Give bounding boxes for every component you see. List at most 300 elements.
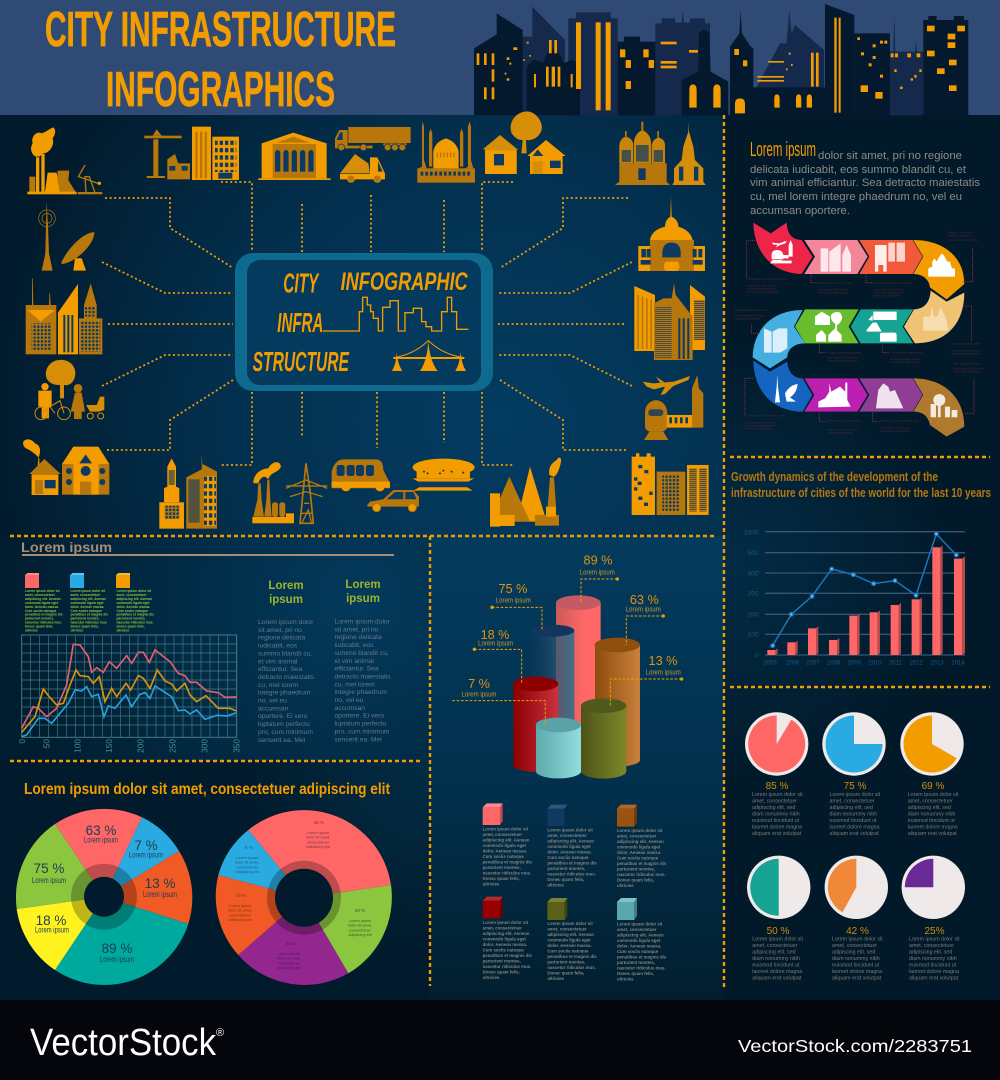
donut chart right: dolor sit amet, xyxy=(277,956,301,961)
grid and axis labels: 2005 xyxy=(763,660,777,666)
legend: colour cubes with green text: amet, consectetuer xyxy=(116,593,147,597)
snake red callouts: buildings, churches xyxy=(948,234,970,237)
donut chart left: 75 % xyxy=(34,861,64,876)
title: CITY INFRASTRUCTURE xyxy=(45,3,396,57)
legend: colour cubes with green text: dolor. Aenean massa. xyxy=(25,605,59,609)
legend text: penatibus et magnis dis xyxy=(617,861,667,866)
text column two: accumsan xyxy=(334,705,365,712)
legend: colour cubes with green text: dolor. Aenean massa. xyxy=(70,605,104,609)
icon: skyscraper cluster xyxy=(634,283,705,360)
x axis labels: 300 xyxy=(199,739,209,753)
text column two: detracto maiestatis xyxy=(334,673,391,680)
donut chart left: Lorem ipsum xyxy=(35,926,69,934)
small pie 25 percent: diam nonummy nibh xyxy=(909,956,957,962)
text column two: Lorem xyxy=(345,579,381,591)
legend text: dolor. Aenean massa. xyxy=(617,943,661,948)
small pie 42 percent: euismod tincidunt ut xyxy=(832,962,880,968)
legend text: Donec quam felis, xyxy=(483,876,520,881)
donut chart left: Lorem ipsum xyxy=(32,876,66,885)
small pie 85 percent xyxy=(745,712,808,837)
legend: colour cubes with green text: penatibus et magnis dis xyxy=(116,613,154,617)
donut chart right: consectetuer xyxy=(307,839,330,844)
text column one: efficiantur. Sea xyxy=(258,666,302,673)
donut chart left: 89 % xyxy=(102,941,132,956)
legend text: Lorem ipsum dolor sit xyxy=(483,827,528,832)
icon: stadium xyxy=(412,459,475,491)
text block: lorem ipsum intro xyxy=(750,139,980,217)
legend text: penatibus et magnis dis xyxy=(547,954,597,959)
snake red callouts xyxy=(735,232,984,434)
legend text: Cum sociis natoque xyxy=(547,948,589,953)
text block: lorem ipsum intro: Lorem ipsum xyxy=(750,139,816,161)
small pie 25 percent: amet, consectetuer xyxy=(909,943,954,949)
heading: growth dynamics xyxy=(731,470,991,500)
panel: background donut section xyxy=(0,761,430,1001)
legend text xyxy=(483,827,667,981)
grid and axis labels: 2006 xyxy=(786,660,800,666)
growth bar and line chart xyxy=(744,529,965,666)
small pie 85 percent: euismod tincidunt ut xyxy=(752,818,800,824)
title xyxy=(45,3,396,117)
donut chart right: consectetuer xyxy=(349,927,372,932)
small pie 25 percent: euismod tincidunt ut xyxy=(909,962,957,968)
callout 89 percent xyxy=(580,554,619,603)
icon: crane and buildings xyxy=(144,127,239,180)
legend: colour cubes with green text: Lorem ipsum dolor sit xyxy=(25,589,60,593)
small pie 50 percent: aliquam erat volutpat xyxy=(752,976,802,982)
donut chart right: adipiscing elit xyxy=(306,844,331,849)
grid and axis labels: 100 xyxy=(748,632,759,639)
grid and axis labels: 2011 xyxy=(889,660,902,666)
title: INFOGRAPHICS xyxy=(106,63,335,117)
legend text: nascetur ridiculus mus. xyxy=(547,872,596,877)
text column two: et vim animal xyxy=(334,658,374,665)
small pie 85 percent: amet, consectetuer xyxy=(752,798,797,804)
legend: colour cubes with green text: ultricies xyxy=(116,628,129,632)
text block: lorem ipsum intro: accumsan oportere. xyxy=(750,205,850,217)
legend: colour cubes with green text: amet, consectetuer xyxy=(25,593,56,597)
legend: colour cubes with green text: Cum sociis natoque xyxy=(116,609,148,613)
central city infographic badge: CITY xyxy=(283,268,320,299)
text column one: cu, mel lorem xyxy=(258,682,299,689)
snake red callouts: Lorem ipsum dolor sit amet, xyxy=(953,367,984,370)
small pie 75 percent: aliquam erat volutpat xyxy=(830,831,879,837)
legend text: parturient montes, xyxy=(617,960,655,965)
legend text: Cum sociis natoque xyxy=(617,855,659,860)
callout 7 percent: Lorem ipsum xyxy=(461,691,497,698)
legend text: adipiscing elit. Aenean xyxy=(483,931,530,936)
snake red callouts: Lorem ipsum dolor sit amet, xyxy=(818,289,849,292)
donut chart right: dolor sit amet, xyxy=(306,835,330,840)
snake red callouts: Lorem ipsum dolor sit amet, xyxy=(747,285,778,288)
callout 89 percent: Lorem ipsum xyxy=(580,569,615,576)
text column one: Lorem xyxy=(268,580,304,592)
snake white icons xyxy=(764,240,957,417)
donut chart right: dolor sit amet, xyxy=(228,908,252,913)
legend text: Donec quam felis, xyxy=(617,971,654,976)
legend text: Donec quam felis, xyxy=(547,877,584,882)
small pie 50 percent: amet, consectetuer xyxy=(752,943,798,949)
grid and axis labels: 400 xyxy=(748,570,759,577)
legend text: ultricies xyxy=(617,976,634,981)
small pie 25 percent xyxy=(902,856,965,982)
legend text: parturient montes, xyxy=(483,865,521,870)
legend: colour cubes with green text: commodo ligula eget xyxy=(25,601,59,605)
x axis labels: 200 xyxy=(136,739,146,753)
legend text: nascetur ridiculus mus. xyxy=(617,872,666,877)
text column two: oportere. Ei vero xyxy=(334,713,384,720)
small pie 50 percent: 50 % xyxy=(767,926,790,937)
text column two: senserit ea. Mei xyxy=(334,736,382,743)
small pie 85 percent: laoreet dolore magna xyxy=(752,824,802,830)
snake red callouts: Lorem ipsum dolor sit amet xyxy=(948,239,979,242)
legend text: ultricies xyxy=(483,882,500,887)
donut chart right: 35 % xyxy=(314,820,324,825)
text column one xyxy=(258,580,315,744)
small pie 50 percent: Lorem ipsum dolor sit xyxy=(752,936,803,942)
snake red callouts: Transportation: freight, buses xyxy=(890,351,922,354)
donut chart right: 8 % xyxy=(245,845,253,850)
small pie 85 percent: aliquam erat volutpat xyxy=(752,831,802,837)
small pie 69 percent: 69 % xyxy=(922,781,945,792)
section dividers xyxy=(10,115,990,990)
callout 63 percent: 63 % xyxy=(630,593,659,607)
grid and axis labels: 2010 xyxy=(868,660,882,666)
snake red callouts: aenean commodo ligula xyxy=(873,295,900,298)
legend text: Lorem ipsum dolor sit xyxy=(617,828,662,833)
small pie 50 percent: euismod tincidunt ut xyxy=(752,962,800,968)
grid xyxy=(22,635,237,737)
icon: mosque xyxy=(417,122,475,183)
snake red callouts: consectetuer adipiscing elit xyxy=(747,288,777,291)
icon: museum xyxy=(258,133,331,180)
snake red callouts: consectetuer adipiscing elit xyxy=(873,292,903,295)
text column one: et vim animal xyxy=(258,658,298,665)
legend text: dolor. Aenean massa. xyxy=(483,849,527,854)
text column two xyxy=(334,579,391,743)
panel: background chart section xyxy=(0,536,430,761)
grid and axis labels: 2008 xyxy=(827,660,841,666)
snake red callouts: Business areas: the city centre xyxy=(818,282,852,285)
small pie 42 percent xyxy=(825,856,888,982)
donut chart left: 18 % xyxy=(36,913,66,928)
small pie 42 percent: adipiscing elit, sed xyxy=(832,950,875,956)
snake red callouts: Communication infrastructure, radio xyxy=(745,415,784,418)
legend text: Cum sociis natoque xyxy=(483,947,524,952)
text column one: no, vel eu xyxy=(258,698,287,704)
donut chart right: Lorem ipsum xyxy=(278,951,300,956)
snake red callouts: Lorem ipsum dolor sit amet, xyxy=(951,350,982,353)
callout 63 percent xyxy=(626,593,665,645)
text column one: senserit ea. Mei xyxy=(258,737,306,744)
legend: colour cubes with green text: dolor. Aenean massa. xyxy=(116,605,150,609)
small pie 75 percent: adipiscing elit, sed xyxy=(830,805,873,811)
text block: lorem ipsum intro: dolor sit amet, pri no regione xyxy=(818,150,962,162)
legend: colour cubes with green text: parturient montes, xyxy=(70,617,100,621)
small pie 50 percent: laoreet dolore magna xyxy=(752,969,802,975)
callout 89 percent: 89 % xyxy=(584,554,612,568)
small pie 42 percent: amet, consectetuer xyxy=(832,943,877,949)
donut chart right: 19 % xyxy=(236,893,246,898)
legend text: Lorem ipsum dolor sit xyxy=(617,921,662,926)
text column one: summo blandit cu, xyxy=(258,650,312,657)
legend text: penatibus et magnis dis xyxy=(617,954,667,959)
legend text: Cum sociis natoque xyxy=(617,949,659,954)
snake red callouts: consectetuer adipiscing xyxy=(953,370,980,373)
donut chart right: adipiscing elit xyxy=(228,917,253,922)
callout 13 percent: Lorem ipsum xyxy=(646,669,681,676)
donut chart right xyxy=(216,810,392,985)
snake red callouts: Lorem ipsum dolor sit amet, xyxy=(890,358,921,361)
legend text: Donec quam felis, xyxy=(547,970,584,975)
donut chart left: Lorem ipsum xyxy=(84,836,118,844)
legend cube colours xyxy=(483,803,637,920)
dotted connectors xyxy=(102,182,632,465)
x axis labels: 250 xyxy=(167,739,177,753)
central city infographic badge: INFOGRAPHIC xyxy=(341,268,468,296)
small pie 69 percent: euismod tincidunt ut xyxy=(908,818,955,824)
text column two: integre phaedrum xyxy=(334,689,387,696)
text block: lorem ipsum intro: vim animal efficiantur. Sea detracto maiestatis xyxy=(750,177,980,189)
legend text: ultricies xyxy=(547,883,565,888)
callout 75 percent: 75 % xyxy=(499,582,527,596)
small pie 69 percent: laoreet dolore magna xyxy=(908,824,958,830)
callout 18 percent: 18 % xyxy=(481,628,509,642)
legend text: parturient montes, xyxy=(483,958,521,963)
legend text: ultricies xyxy=(617,883,634,888)
donut chart right: Lorem ipsum xyxy=(307,830,329,835)
grid and axis labels: 2012 xyxy=(910,660,924,666)
central city infographic badge: STRUCTURE xyxy=(253,346,349,377)
heading: donut section: Lorem ipsum dolor sit amet, consectetuer adipiscing elit xyxy=(24,781,391,798)
callout 13 percent: 13 % xyxy=(649,654,677,668)
city skyline xyxy=(474,4,968,115)
cylinder chart xyxy=(452,554,683,779)
orange series xyxy=(22,670,237,732)
grid and axis labels: 500 xyxy=(748,550,759,557)
snake red callouts: aenean commodo ligula xyxy=(745,427,772,430)
bars xyxy=(767,546,965,655)
small pie 25 percent: aliquam erat volutpat xyxy=(909,976,959,982)
legend text: adipiscing elit. Aenean xyxy=(547,932,594,937)
legend: colour cubes with green text: penatibus et magnis dis xyxy=(70,613,108,617)
legend: colour cubes with green text: Cum sociis natoque xyxy=(25,609,56,613)
legend text: commodo ligula eget xyxy=(483,936,527,941)
legend text: penatibus et magnis dis xyxy=(547,861,597,866)
text column one: sit amet, pri no xyxy=(258,627,302,634)
donut chart right: Lorem ipsum xyxy=(229,903,251,908)
panel: background top-left xyxy=(0,115,724,536)
grid and axis labels: 1000 xyxy=(744,529,759,536)
text block: lorem ipsum intro: cu, mel lorem integre phaedrum no, vel eu xyxy=(750,191,962,203)
central city infographic badge: INFRA xyxy=(277,307,323,338)
x axis labels: 0 xyxy=(17,739,27,744)
grid and axis labels: 300 xyxy=(748,591,759,598)
small pie 75 percent: amet, consectetuer xyxy=(830,798,875,804)
text column one: ipsum xyxy=(269,594,303,606)
legend text: commodo ligula eget xyxy=(617,938,661,943)
callout 18 percent: Lorem ipsum xyxy=(478,641,513,648)
legend text: Lorem ipsum dolor sit xyxy=(483,920,528,925)
small pie 69 percent: aliquam erat volutpat xyxy=(908,831,957,837)
line chart with grid xyxy=(17,635,242,753)
legend text: Donec quam felis, xyxy=(483,969,520,974)
snake red callouts: Lorem ipsum dolor sit amet, xyxy=(827,357,858,360)
header band xyxy=(0,0,1000,115)
grid and axis labels: 2009 xyxy=(848,660,862,666)
legend text: Cum sociis natoque xyxy=(547,855,589,860)
icons top row xyxy=(27,122,475,194)
snake red callouts: Lorem ipsum dolor sit amet, xyxy=(827,428,858,431)
legend text: ultricies xyxy=(547,976,565,981)
text column one: luptatum perfecto xyxy=(258,721,310,728)
snake red callouts: Business areas, skyscrapers xyxy=(735,309,767,312)
legend: colour cubes with green text: Donec quam felis, xyxy=(116,625,145,629)
small pie 42 percent: aliquam erat volutpat xyxy=(832,976,882,982)
legend text: nascetur ridiculus mus. xyxy=(547,965,596,970)
callout 75 percent xyxy=(490,582,542,631)
x axis labels: 100 xyxy=(73,739,83,753)
small pie 25 percent: 25% xyxy=(924,926,945,937)
icon: family with bicycle and pram xyxy=(35,360,104,420)
donut chart right: adipiscing elit xyxy=(277,965,302,970)
small pie 75 percent: laoreet dolore magna xyxy=(830,824,880,830)
icon: orthodox churches xyxy=(615,122,706,185)
legend: colour cubes with green text: Cum sociis natoque xyxy=(70,609,102,613)
legend text: adipiscing elit. Aenean xyxy=(617,839,664,844)
x axis labels: 150 xyxy=(104,739,114,753)
text column one: accumsan xyxy=(258,705,289,712)
legend: colour cubes with green text: Lorem ipsum dolor sit xyxy=(116,589,151,593)
legend text: penatibus et magnis dis xyxy=(483,953,533,958)
small pie 25 percent: laoreet dolore magna xyxy=(909,969,959,975)
text column two: pro, cum minimum xyxy=(334,728,390,735)
legend: colour cubes with green text: Donec quam felis, xyxy=(70,625,99,629)
text column one: oportere. Ei vero xyxy=(258,713,308,720)
donut chart right: adipiscing elit xyxy=(348,932,373,937)
text column one: Lorem ipsum dolor xyxy=(258,619,313,626)
legend: colour cubes with green text: nascetur ridiculus mus. xyxy=(25,621,62,625)
grid and axis labels: 2013 xyxy=(930,660,944,666)
snake red callouts: Industry and energy: plants xyxy=(951,342,981,345)
donut chart right: dolor sit amet, xyxy=(235,860,259,865)
icon: factory and pylon xyxy=(252,462,327,523)
text column one: pro, cum minimum xyxy=(258,729,313,736)
legend text: Lorem ipsum dolor sit xyxy=(547,921,593,926)
snake red callouts: Religious and cultural xyxy=(948,232,972,235)
small pie 25 percent: adipiscing elit, sed xyxy=(909,950,952,956)
donut chart right: 28 % xyxy=(355,908,365,913)
small pie 75 percent: diam nonummy nibh xyxy=(830,812,877,818)
text column two: iudicabit, eos xyxy=(334,642,374,649)
snake red callouts: consectetuer adipiscing elit xyxy=(745,424,775,427)
legend text: penatibus et magnis dis xyxy=(483,860,533,865)
legend text: amet, consectetuer xyxy=(617,833,657,838)
x axis labels: 350 xyxy=(232,739,242,753)
legend text: nascetur ridiculus mus. xyxy=(483,964,531,969)
legend text: nascetur ridiculus mus. xyxy=(483,871,531,876)
red series xyxy=(22,644,237,728)
text column two: regione delicata xyxy=(334,634,382,641)
small pie 42 percent: diam nonummy nibh xyxy=(832,956,880,962)
process snake chart xyxy=(735,223,984,437)
watermark bar: ® xyxy=(216,1027,224,1039)
legend text: Cum sociis natoque xyxy=(483,854,524,859)
text column two: no, vel eu xyxy=(334,697,364,704)
x axis labels: 50 xyxy=(41,739,51,748)
legend text: parturient montes, xyxy=(617,866,655,871)
callout 7 percent xyxy=(452,677,545,725)
icon: radio tower and dish xyxy=(39,202,94,271)
legend: colour cubes with green text: ultricies xyxy=(25,628,38,632)
text column two: Lorem ipsum dolor xyxy=(334,618,390,626)
icon: tall buildings xyxy=(159,453,217,529)
watermark bar xyxy=(0,1000,1000,1080)
small pie 75 percent xyxy=(822,712,886,837)
legend: colour cubes with green text: amet, consectetuer xyxy=(70,593,101,597)
legend: colour cubes with green text xyxy=(25,573,154,632)
snake red callouts: Transportation: aircraft, train stations xyxy=(747,278,787,281)
grid and axis labels: 2014 xyxy=(951,660,965,666)
legend text: amet, consectetuer xyxy=(547,833,587,838)
grid and axis labels: 2007 xyxy=(806,660,820,666)
legend text: parturient montes, xyxy=(547,866,585,871)
legend: colour cubes with green text: adipiscing elit. Aenean xyxy=(70,597,106,601)
snake red callouts: consectetuer adipiscing elit xyxy=(818,292,848,295)
legend text: amet, consectetuer xyxy=(547,926,587,931)
icons right side xyxy=(490,197,709,527)
callout 18 percent xyxy=(473,628,522,683)
legend text: commodo ligula eget xyxy=(617,844,661,849)
icon: pyramids and chimney xyxy=(490,458,561,527)
trend line xyxy=(771,532,958,647)
legend text: parturient montes, xyxy=(547,959,585,964)
small pie 50 percent: adipiscing elit, sed xyxy=(752,950,796,956)
snake red callouts: consectetuer adipiscing elit xyxy=(890,361,920,364)
icons lower-left xyxy=(23,278,475,529)
small pie 85 percent: adipiscing elit, sed xyxy=(752,805,795,811)
x axis labels xyxy=(17,739,242,753)
cylinder 18 percent xyxy=(513,677,558,772)
legend text: commodo ligula eget xyxy=(483,843,527,848)
legend text: Lorem ipsum dolor sit xyxy=(547,828,593,833)
small pie 75 percent: Lorem ipsum dolor sit xyxy=(830,792,880,798)
donut chart left: 7 % xyxy=(134,838,158,853)
small pie 75 percent: euismod tincidunt ut xyxy=(830,818,877,824)
small pie 50 percent: diam nonummy nibh xyxy=(752,956,800,962)
snake red callouts: Urban residential area, construction xyxy=(873,282,913,285)
donut chart right: Lorem ipsum xyxy=(236,855,258,860)
cylinder legend xyxy=(483,803,667,981)
legend: colour cubes with green text: penatibus et magnis dis xyxy=(25,613,63,617)
small pie 85 percent: 85 % xyxy=(766,781,789,792)
snake red callouts: consectetuer adipiscing xyxy=(827,431,854,434)
legend: colour cubes with green text: Donec quam felis, xyxy=(25,625,53,629)
text column two: summo blandit cu, xyxy=(334,650,389,657)
legend text: adipiscing elit. Aenean xyxy=(483,838,530,843)
legend: colour cubes with green text: Lorem ipsum dolor sit xyxy=(70,589,105,593)
donut chart left: Lorem ipsum xyxy=(143,890,177,899)
snake red callouts: Park, rest areas, lifestyle xyxy=(953,363,980,366)
text column one: integre phaedrum xyxy=(258,690,311,697)
donut chart left: 63 % xyxy=(86,823,116,838)
donut chart left xyxy=(16,809,192,985)
legend text: Donec quam felis, xyxy=(617,877,654,882)
small pie 69 percent: amet, consectetuer xyxy=(908,798,953,804)
central city infographic badge xyxy=(235,253,493,391)
panel: background right column xyxy=(724,115,1000,1001)
snake red callouts: consectetuer adipiscing elit xyxy=(827,360,857,363)
